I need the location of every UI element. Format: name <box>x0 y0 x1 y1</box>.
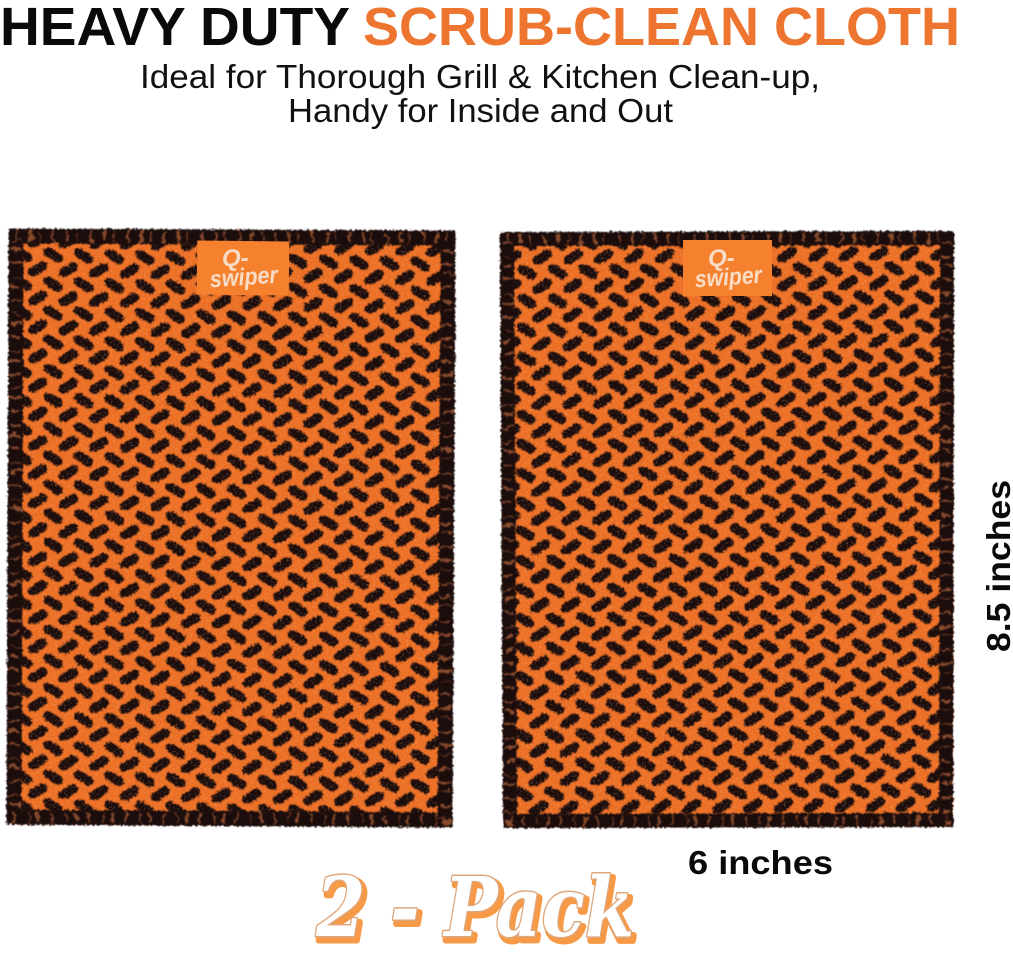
icon: left cloth brand label: swiper <box>209 262 280 293</box>
icon: left cloth brand label: Q- <box>222 245 249 272</box>
icon: right cloth brand label <box>683 240 772 296</box>
subtitle: Ideal for Thorough Grill & Kitchen Clean-up, <box>140 58 820 95</box>
icon: right cloth brand label: Q- <box>708 245 735 272</box>
pack count badge: 2 - Pack <box>315 860 634 954</box>
icon: left cloth brand label <box>197 241 289 295</box>
panel: left cloth <box>8 231 454 826</box>
subtitle <box>140 58 820 129</box>
width dimension label: 6 inches <box>688 844 833 881</box>
title <box>0 0 960 57</box>
icon: right cloth brand label: swiper <box>694 262 764 293</box>
panel: right cloth <box>501 233 953 827</box>
subtitle: Handy for Inside and Out <box>288 92 673 129</box>
